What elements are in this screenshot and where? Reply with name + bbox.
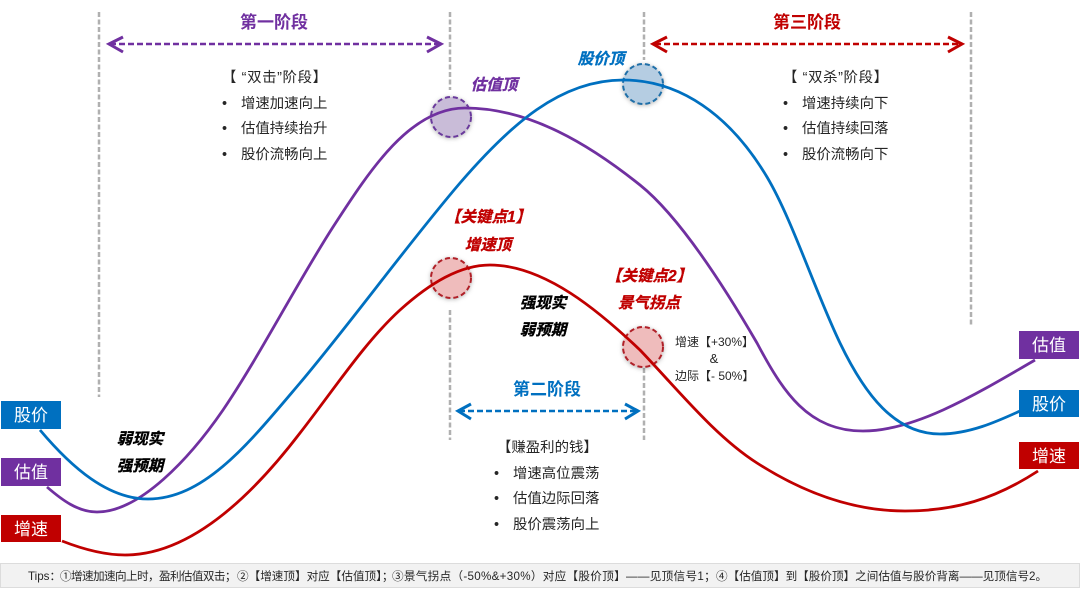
text: stage two: 【赚盈利的钱】 <box>497 439 598 456</box>
right label: valuation <box>1019 331 1079 359</box>
marker: stock price top <box>623 64 663 104</box>
callout: weak reality strong expectation: 强预期 <box>117 458 166 475</box>
callout: key point 2: 景气拐点 <box>618 294 682 312</box>
curve: valuation <box>47 108 1035 512</box>
callout: weak reality strong expectation <box>117 430 166 475</box>
text: stage two: • <box>494 517 499 533</box>
right label: growth: 增速 <box>1032 447 1066 466</box>
arrow: stage two <box>458 404 638 419</box>
text: stage two: 增速高位震荡 <box>513 465 599 482</box>
left label: growth <box>1 515 61 542</box>
text: stage three: 增速持续向下 <box>802 95 888 112</box>
marker: growth top <box>431 258 471 298</box>
left label: valuation <box>1 458 61 486</box>
text: stage three: • <box>783 147 788 163</box>
text: stage three: • <box>783 96 788 112</box>
right label: stock price: 股价 <box>1032 395 1066 414</box>
text: stage one: 增速加速向上 <box>241 95 327 112</box>
text: thresholds: 增速【+30%】 <box>675 335 754 349</box>
callout: stock price top: 股价顶 <box>578 50 628 68</box>
callout: valuation top: 估值顶 <box>471 76 521 94</box>
text: stage one: • <box>222 96 227 112</box>
text: stage three: 【 “双杀”阶段】 <box>783 69 888 86</box>
text: stage three <box>783 69 888 163</box>
tips bar: ④【估值顶】到【股价顶】之间估值与股价背离——见顶信号2。 <box>716 569 1047 583</box>
text: stage two: • <box>494 491 499 507</box>
left label: stock price: 股价 <box>14 406 48 425</box>
text: stage two <box>494 439 599 533</box>
text: stage one: • <box>222 147 227 163</box>
text: thresholds <box>675 335 754 383</box>
callout: key point 2 <box>606 267 692 312</box>
heading: stage three: 第三阶段 <box>773 12 841 32</box>
heading: stage one: 第一阶段 <box>240 12 308 32</box>
tips bar: ③景气拐点（-50%&+30%）对应【股价顶】——见顶信号1； <box>392 569 716 583</box>
callout: key point 2: 【关键点2】 <box>606 267 692 285</box>
arrow: stage one <box>109 37 441 52</box>
text: thresholds: & <box>710 351 719 366</box>
marker: inflection point <box>623 327 663 367</box>
text: stage two: 估值边际回落 <box>513 490 599 507</box>
text: stage two: 股价震荡向上 <box>513 516 599 533</box>
text: stage three: 估值持续回落 <box>802 120 888 137</box>
text: stage one: 【 “双击”阶段】 <box>222 69 327 86</box>
tips bar: Tips： <box>28 570 61 583</box>
callout: strong reality weak expectation: 强现实 <box>520 294 569 312</box>
curve: growth <box>62 265 1038 555</box>
callout: key point 1 <box>445 208 531 254</box>
text: stage three: • <box>783 121 788 137</box>
right label: stock price <box>1019 390 1079 417</box>
text: stage one: 估值持续抬升 <box>241 120 327 137</box>
left label: stock price <box>1 401 61 429</box>
callout: strong reality weak expectation <box>520 294 569 339</box>
text: stage one: 股价流畅向上 <box>241 146 327 163</box>
callout: key point 1: 增速顶 <box>465 236 515 254</box>
right label: valuation: 估值 <box>1032 336 1066 355</box>
tips bar: ①增速加速向上时，盈利估值双击； <box>60 569 236 583</box>
text: thresholds: 边际【- 50%】 <box>675 369 754 383</box>
left label: valuation: 估值 <box>14 463 48 482</box>
text: stage two: • <box>494 466 499 482</box>
arrow: stage three <box>653 37 962 52</box>
marker: valuation top <box>431 97 471 137</box>
callout: weak reality strong expectation: 弱现实 <box>117 430 166 448</box>
heading: stage two: 第二阶段 <box>513 379 581 399</box>
curve: stock price <box>40 80 1020 499</box>
text: stage one <box>222 69 327 163</box>
left label: growth: 增速 <box>14 520 48 539</box>
callout: key point 1: 【关键点1】 <box>445 208 531 226</box>
text: stage three: 股价流畅向下 <box>802 146 888 163</box>
tips bar: ②【增速顶】对应【估值顶】； <box>237 569 394 583</box>
right label: growth <box>1019 442 1079 469</box>
callout: strong reality weak expectation: 弱预期 <box>520 322 569 339</box>
text: stage one: • <box>222 121 227 137</box>
tips bar <box>0 564 1080 588</box>
